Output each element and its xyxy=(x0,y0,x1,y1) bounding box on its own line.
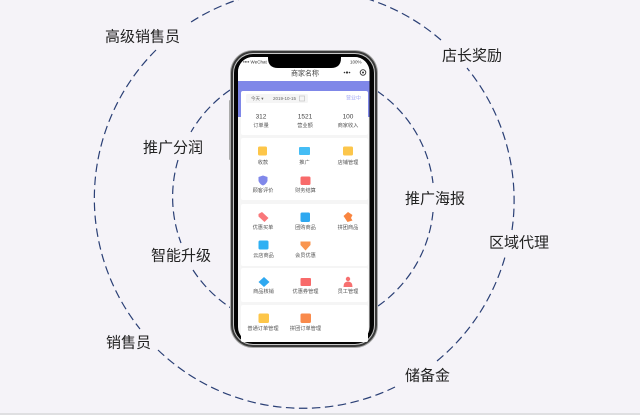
stat: turnover xyxy=(297,114,314,129)
item: reviews: 顾客评价 xyxy=(253,186,274,194)
phone frame xyxy=(229,50,378,348)
stat: orders xyxy=(253,114,269,129)
label: promotion poster: 推广海报 xyxy=(405,190,465,208)
phone screen xyxy=(238,55,370,342)
card: management xyxy=(241,268,368,302)
item: coupons: 优惠券管理 xyxy=(293,287,319,295)
item: store: 店铺管理 xyxy=(338,158,359,166)
label: promotion profit sharing: 推广分润 xyxy=(143,140,203,156)
label: senior salesperson: 高级销售员 xyxy=(105,28,180,46)
date selector: 2019-10-15 xyxy=(273,96,297,101)
stat: turnover: 1521 xyxy=(298,114,313,120)
card: goods xyxy=(241,204,368,266)
item: joint goods: 拼团商品 xyxy=(338,223,358,231)
card: orders xyxy=(241,305,368,342)
item: member offers: 会员优惠 xyxy=(295,251,316,259)
item: verify goods: 商品核销 xyxy=(253,287,274,295)
status bar: •••• WeChat xyxy=(243,60,267,64)
stat: income xyxy=(338,114,358,129)
item: promote: 推广 xyxy=(299,158,310,166)
label: store manager reward: 店长奖励 xyxy=(442,48,502,64)
card: basic functions xyxy=(241,138,368,200)
stat: turnover: 营业额 xyxy=(297,121,314,129)
notch xyxy=(268,55,341,68)
label: salesperson: 销售员 xyxy=(106,334,151,352)
outer dashed ring xyxy=(94,0,514,408)
date selector: 今天 ▾ xyxy=(251,95,264,102)
status: open: 营业中 xyxy=(346,94,361,102)
phone contents xyxy=(238,55,370,342)
stat: orders: 订单量 xyxy=(253,121,269,129)
capsule target icon xyxy=(360,70,366,75)
stat: orders: 312 xyxy=(256,114,267,120)
label: reserve fund: 储备金 xyxy=(405,368,450,384)
item: regular orders: 普通订单管理 xyxy=(247,324,279,332)
item: finance: 财务结算 xyxy=(295,186,316,194)
stat: income: 商家收入 xyxy=(338,121,358,129)
inner dashed ring xyxy=(173,90,433,308)
card: daily stats xyxy=(241,91,368,135)
date selector xyxy=(246,94,308,103)
item: collect: 收款 xyxy=(258,158,269,166)
item: staff: 员工管理 xyxy=(338,287,359,295)
label: smart upgrade: 智能升级 xyxy=(151,246,211,264)
item: cloud goods: 云店商品 xyxy=(253,251,274,259)
stat: income: 100 xyxy=(343,114,354,120)
phone mockup xyxy=(229,50,378,348)
item: discount: 优惠买单 xyxy=(253,223,273,231)
item: group orders: 拼团订单管理 xyxy=(290,324,322,332)
screen title: 商家名称 xyxy=(291,68,319,78)
battery: 100% xyxy=(350,60,362,64)
capsule menu xyxy=(344,71,350,74)
label: regional agent: 区域代理 xyxy=(489,234,549,252)
item: group goods: 团购商品 xyxy=(295,223,316,231)
